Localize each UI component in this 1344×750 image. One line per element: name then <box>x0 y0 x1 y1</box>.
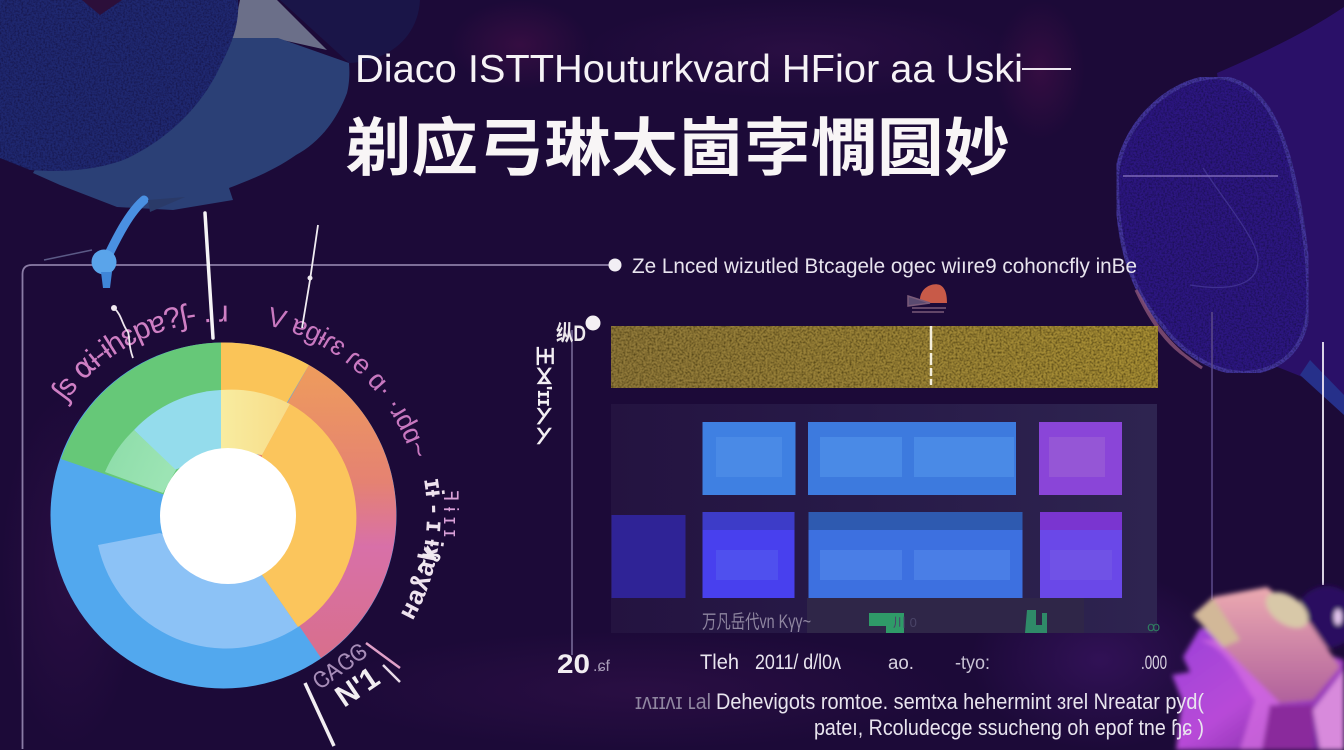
footer note: ɪʌɪɪʌɪ ʟal <box>635 689 711 714</box>
outer segment: green <box>61 342 223 515</box>
x axis labels: -tyo: <box>955 653 990 674</box>
outer segment: orange pink <box>224 365 396 658</box>
decoration: right hood <box>1117 7 1344 415</box>
bar E <box>702 512 794 598</box>
x axis labels: .ɕf <box>593 658 610 675</box>
inner segment: light green <box>105 430 176 493</box>
y axis top label: 纵D <box>556 321 586 346</box>
icon: small orange mound <box>908 284 947 312</box>
chart subtitle: Ze Lnced wizutled Btcagele ogec wiıre9 cohoncfly inBe <box>632 255 1137 278</box>
inner segment: cyan <box>134 390 221 470</box>
decoration: top-left blue cap <box>0 0 420 210</box>
footer note: pateı, Rcoludecge ssucheng oh epof tne ɧɕ ) <box>814 715 1204 740</box>
bar F <box>808 512 1022 598</box>
leader lines above donut <box>111 213 318 358</box>
donut curved labels: ꟻ ɨ ɪ ɪ <box>439 490 461 537</box>
icon: blue pin connector <box>44 197 185 288</box>
frame line with dot <box>22 258 622 749</box>
x axis labels: 2011/ d/l0ʌ <box>755 651 841 674</box>
donut hole <box>160 448 296 584</box>
chart panel <box>611 404 1157 633</box>
x axis labels <box>557 649 1167 679</box>
footer note <box>635 689 1205 740</box>
x axis labels: 20 <box>557 649 590 679</box>
lower strip: ꝏ <box>1147 619 1160 634</box>
donut curved labels <box>52 303 461 747</box>
y axis vertical label: 王 ⋊ ' ɪ ɪ ⋋ ⋋ <box>533 346 555 446</box>
vertical divider lines <box>1212 312 1323 600</box>
title rule <box>1022 68 1071 70</box>
inner segment: amber <box>262 404 356 627</box>
donut curved labels: ~ɣ <box>407 540 444 578</box>
lower strip: 川 0 <box>893 615 917 630</box>
chart axis <box>572 316 600 655</box>
donut curved labels: N'1 <box>329 661 386 714</box>
x axis labels: ao. <box>888 653 914 674</box>
donut curved labels: ʃs ⍺ɨ-ɨhɛpɐ?ʃ- . ɹ <box>52 303 227 407</box>
x axis labels: Tleh <box>700 651 739 674</box>
outer segment: yellow <box>221 342 309 515</box>
bar row 2 <box>612 512 1122 598</box>
bar B <box>808 422 1016 495</box>
bar D <box>612 515 686 598</box>
bar row 1 <box>702 422 1122 495</box>
title: English: Diaco ISTTHouturkvard HFior aa Uski <box>355 48 1023 91</box>
x axis labels: .000 <box>1141 653 1167 674</box>
bar G <box>1040 512 1122 598</box>
footer note: Dehevigots romtoe. semtxa hehermint ɜrel Nreatar pyd( <box>716 689 1205 714</box>
donut curved labels: V ɐgɨɾɛ ɾe ɑ· ·ɹdɑ~ <box>270 306 422 456</box>
inner segment: light blue <box>98 533 298 649</box>
gold bar <box>611 326 1158 388</box>
lower strip <box>702 598 1160 634</box>
donut curved labels: ᏣᎪᏣᎶ <box>308 638 372 694</box>
donut curved labels: ɪɨ - ɪ ɨʞɐɣɐʜ <box>401 478 445 620</box>
title: Chinese: 剃应弓琳太崮孛憪圆妙 <box>345 98 1010 189</box>
lower strip: 万凡岳代vn Kγγ~ <box>702 611 811 633</box>
inner segment: pale yellow <box>221 390 290 455</box>
donut chart <box>50 342 396 688</box>
decoration: bottom-right blob <box>1172 585 1344 750</box>
bar A <box>702 422 796 495</box>
bar C <box>1039 422 1122 495</box>
